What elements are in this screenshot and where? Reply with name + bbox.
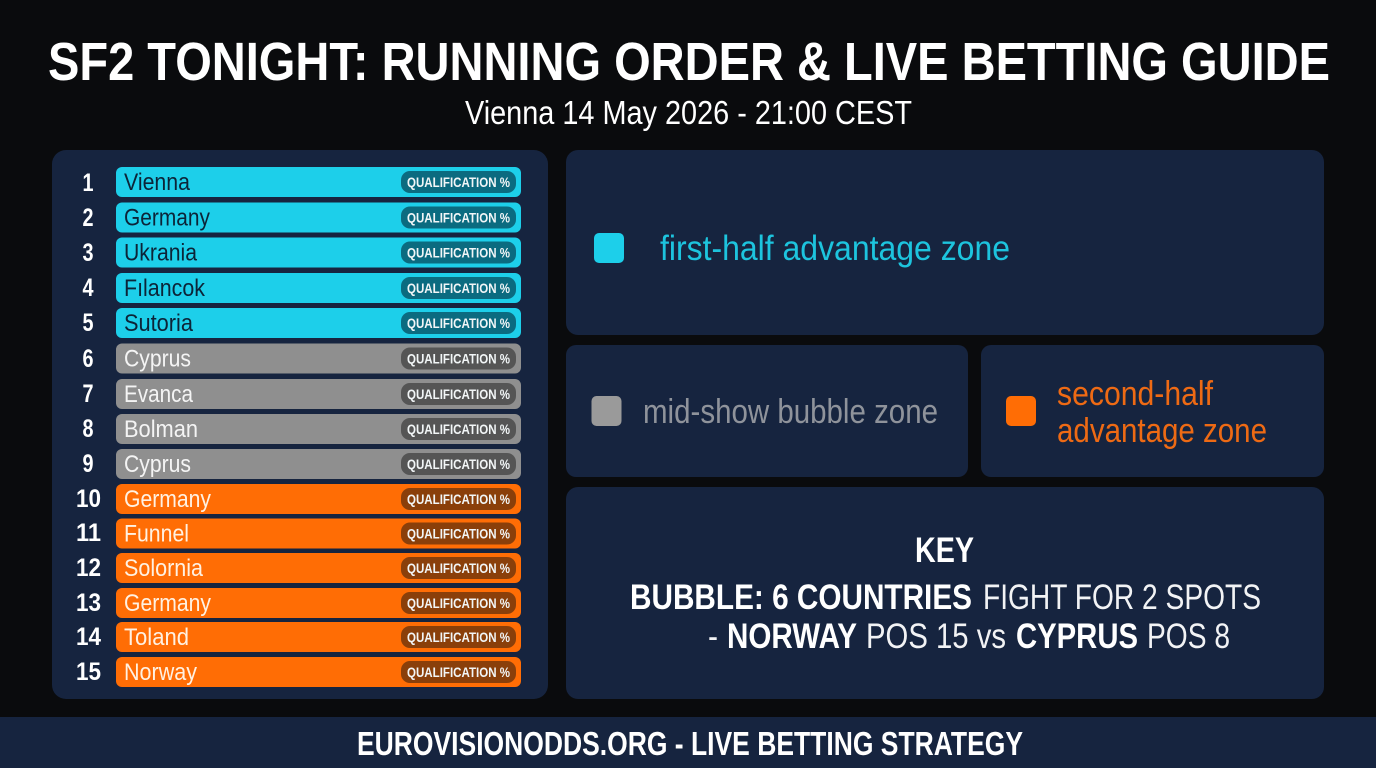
row 15 [76, 657, 521, 687]
row 8: 8 [82, 415, 94, 443]
row 8: Bolman [124, 416, 198, 443]
row 1: QUALIFICATION % [407, 174, 510, 190]
row 7: 7 [82, 380, 94, 408]
key line 2 [708, 617, 1230, 656]
row 2: QUALIFICATION % [407, 210, 510, 226]
row 9 [82, 449, 521, 479]
row 13: QUALIFICATION % [407, 595, 510, 611]
icon: orange swatch [1006, 396, 1036, 426]
panel: mid-show zone [566, 345, 968, 477]
row 8: QUALIFICATION % [407, 421, 510, 437]
row 14 [76, 622, 521, 652]
row 7 [82, 379, 521, 409]
row 3 [82, 238, 521, 268]
row 10: Germany [124, 486, 211, 513]
row 12: Solornia [124, 555, 204, 582]
row 11: 11 [76, 519, 101, 547]
key line 2: CYPRUS [1016, 617, 1138, 656]
row 5: Sutoria [124, 310, 194, 337]
row 1: Vienna [124, 169, 191, 196]
row 15: 15 [76, 658, 101, 686]
row 13 [76, 588, 521, 618]
icon: cyan swatch [594, 233, 624, 263]
row 12: 12 [76, 554, 101, 582]
row 2: Germany [124, 204, 210, 232]
mid-show label: mid-show bubble zone [643, 393, 938, 431]
row 2: 2 [82, 204, 94, 232]
key line 1 [630, 578, 1261, 617]
key line 2: POS 8 [1147, 617, 1230, 656]
row 13: 13 [76, 589, 101, 617]
row 2 [82, 202, 521, 232]
row 8 [82, 414, 521, 444]
key line 1: FIGHT FOR 2 SPOTS [983, 578, 1261, 617]
key heading: KEY [915, 531, 974, 570]
row 14: Toland [124, 624, 189, 651]
row 4: 4 [82, 274, 94, 302]
row 11 [76, 518, 521, 548]
row 9: 9 [82, 450, 94, 478]
row 12: QUALIFICATION % [407, 560, 510, 576]
key line 1: BUBBLE: 6 COUNTRIES [630, 578, 972, 617]
row 11: Funnel [124, 520, 189, 548]
icon: grey swatch [592, 396, 622, 426]
row 3: 3 [82, 239, 94, 267]
key line 2: POS 15 vs [866, 617, 1006, 656]
row 7: Evanca [124, 381, 194, 408]
row 14: 14 [76, 623, 101, 651]
row 6: Cyprus [124, 346, 191, 372]
second-half label: advantage zone [1057, 412, 1267, 450]
row 5: QUALIFICATION % [407, 315, 510, 331]
row 7: QUALIFICATION % [407, 386, 510, 402]
row 6 [82, 344, 521, 374]
row 4: Fılancok [124, 275, 206, 302]
row 1: 1 [82, 169, 94, 197]
row 11: QUALIFICATION % [407, 526, 510, 542]
second-half label [1057, 375, 1267, 450]
panel: running order [52, 150, 548, 699]
panel: first-half zone [566, 150, 1324, 335]
row 15: Norway [124, 659, 197, 686]
panel: second-half zone [981, 345, 1324, 477]
row 5: 5 [82, 309, 94, 337]
row 9: Cyprus [124, 451, 191, 478]
row 10 [76, 484, 521, 514]
row 12 [76, 553, 521, 583]
row 9: QUALIFICATION % [407, 456, 510, 472]
footer bar [0, 717, 1376, 768]
key line 2: - [708, 617, 718, 656]
row 15: QUALIFICATION % [407, 664, 510, 680]
panel: key [566, 487, 1324, 699]
row 1 [82, 167, 521, 197]
first-half label: first-half advantage zone [660, 229, 1010, 268]
row 3: QUALIFICATION % [407, 244, 510, 260]
key line 2: NORWAY [727, 617, 857, 656]
row 6: QUALIFICATION % [407, 350, 510, 366]
row 3: Ukrania [124, 240, 198, 266]
second-half label: second-half [1057, 375, 1213, 413]
footer text: EUROVISIONODDS.ORG - LIVE BETTING STRATEGY [357, 725, 1023, 762]
row 4: QUALIFICATION % [407, 280, 510, 296]
row 4 [82, 273, 521, 303]
row 6: 6 [82, 345, 94, 373]
row 14: QUALIFICATION % [407, 629, 510, 645]
row 5 [82, 308, 521, 338]
row 10: QUALIFICATION % [407, 491, 510, 507]
subtitle: Vienna 14 May 2026 - 21:00 CEST [465, 94, 912, 131]
row 10: 10 [76, 485, 101, 513]
row 13: Germany [124, 590, 211, 617]
